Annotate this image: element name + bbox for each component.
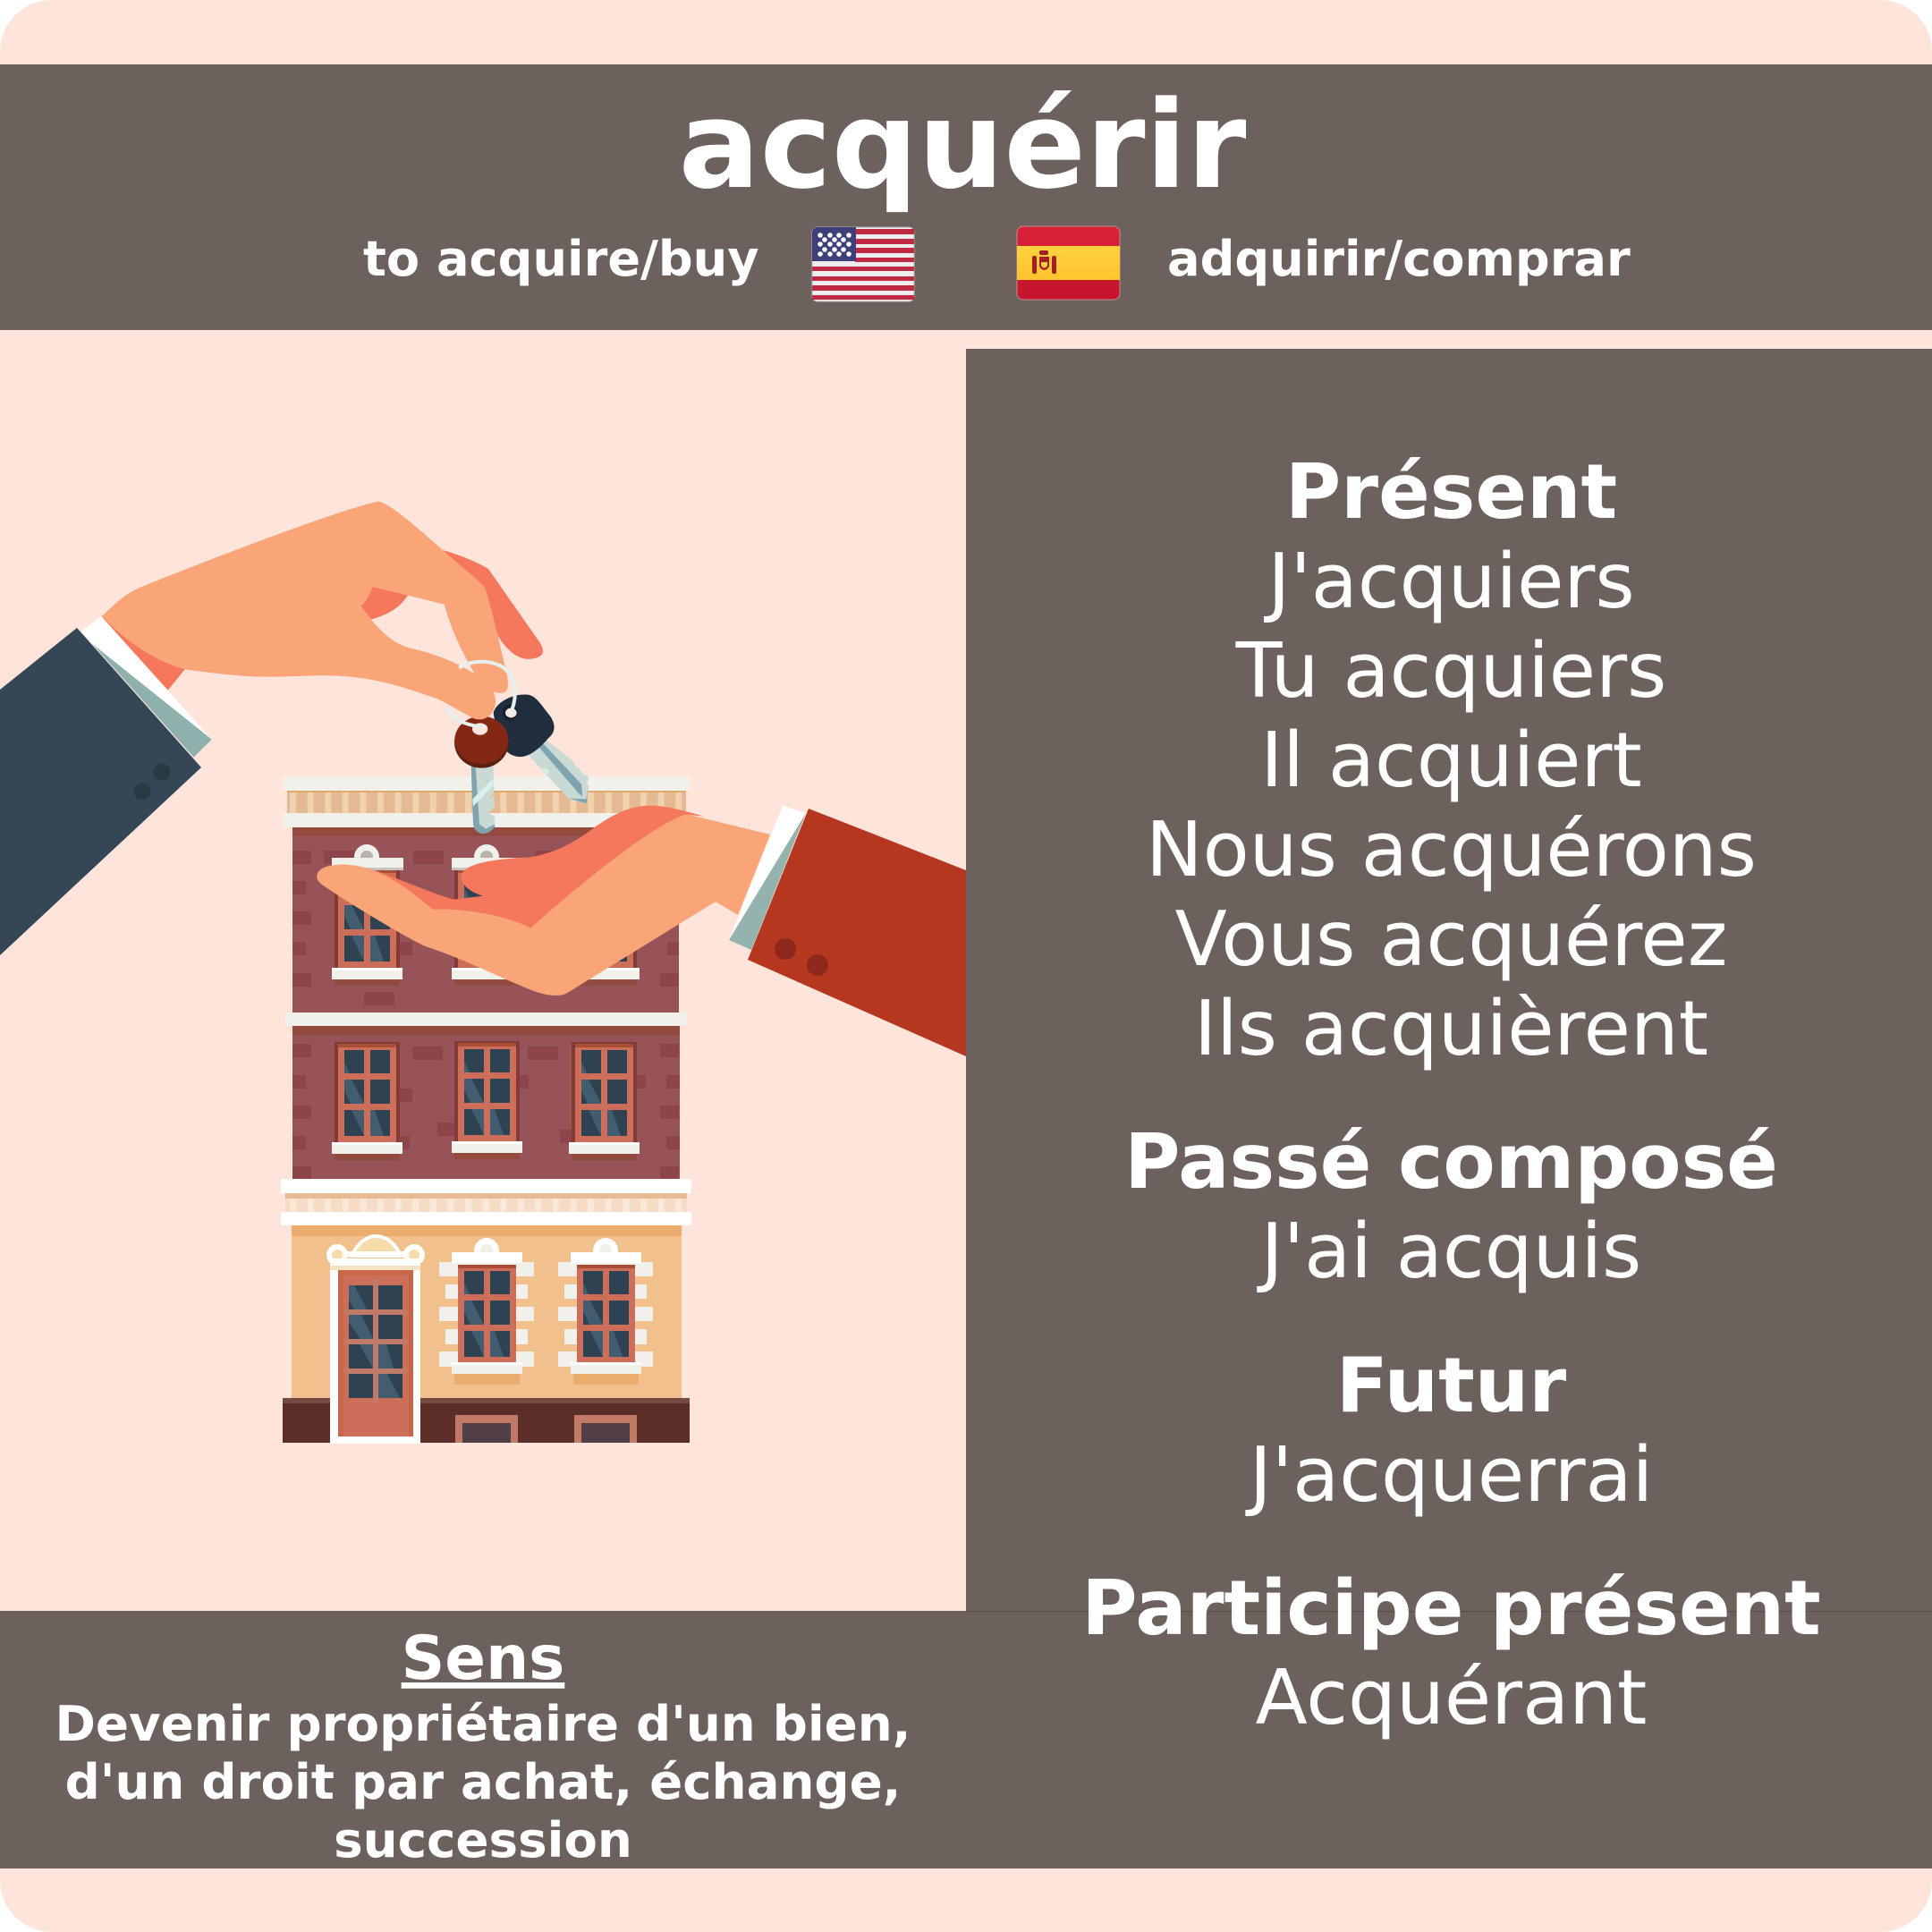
present tense: Il acquiert bbox=[1260, 716, 1642, 805]
participe présent: Acquérant bbox=[1256, 1654, 1647, 1742]
Spanish translation: adquirir/comprar bbox=[1167, 231, 1631, 287]
basement bbox=[283, 1398, 690, 1443]
middle floor bbox=[285, 1013, 687, 1179]
right sleeve bbox=[748, 809, 966, 1056]
definition text: d'un droit par achat, échange, bbox=[65, 1753, 901, 1810]
illustration: hands and keys bbox=[0, 502, 966, 1056]
present tense: Vous acquérez bbox=[1175, 895, 1727, 984]
right sleeve cuff bbox=[729, 806, 806, 950]
left sleeve cuff bbox=[81, 616, 212, 758]
red key bbox=[454, 716, 509, 834]
key ring lower part bbox=[445, 708, 486, 727]
top floor bbox=[284, 776, 690, 1013]
present tense: Nous acquérons bbox=[1146, 806, 1757, 894]
futur: J'acquerrai bbox=[1245, 1431, 1653, 1520]
futur bbox=[1245, 1342, 1653, 1520]
icon: Spanish flag bbox=[1017, 226, 1120, 300]
futur: Futur bbox=[1336, 1342, 1566, 1430]
participe présent bbox=[1081, 1564, 1821, 1742]
icon: US flag bbox=[812, 227, 914, 301]
participe présent: Participe présent bbox=[1081, 1564, 1821, 1653]
definition text: succession bbox=[334, 1811, 632, 1868]
left hand bbox=[101, 502, 543, 719]
ground floor bbox=[281, 1179, 691, 1444]
passé composé: Passé composé bbox=[1124, 1118, 1778, 1207]
dark key bbox=[494, 694, 589, 803]
right hand bbox=[317, 806, 770, 996]
definition text: Devenir propriétaire d'un bien, bbox=[55, 1695, 911, 1752]
illustration: building bbox=[281, 776, 691, 1444]
present tense bbox=[1146, 448, 1757, 1073]
panel: meaning bbox=[0, 1611, 966, 1868]
door bbox=[329, 1236, 422, 1444]
right palm shadow bbox=[355, 806, 704, 928]
passé composé: J'ai acquis bbox=[1257, 1208, 1641, 1296]
present tense: Tu acquiers bbox=[1235, 627, 1666, 716]
passé composé bbox=[1124, 1118, 1778, 1296]
key ring upper part bbox=[459, 662, 515, 716]
present tense: Présent bbox=[1285, 448, 1617, 537]
title: acquérir bbox=[679, 75, 1247, 216]
panel: conjugations bbox=[966, 349, 1932, 1868]
left sleeve bbox=[0, 628, 201, 955]
header band bbox=[0, 64, 1932, 330]
definition text bbox=[55, 1695, 911, 1868]
heading: Sens: Sens bbox=[402, 1623, 564, 1693]
present tense: J'acquiers bbox=[1263, 538, 1635, 626]
English translation: to acquire/buy bbox=[363, 231, 759, 287]
present tense: Ils acquièrent bbox=[1194, 985, 1708, 1073]
